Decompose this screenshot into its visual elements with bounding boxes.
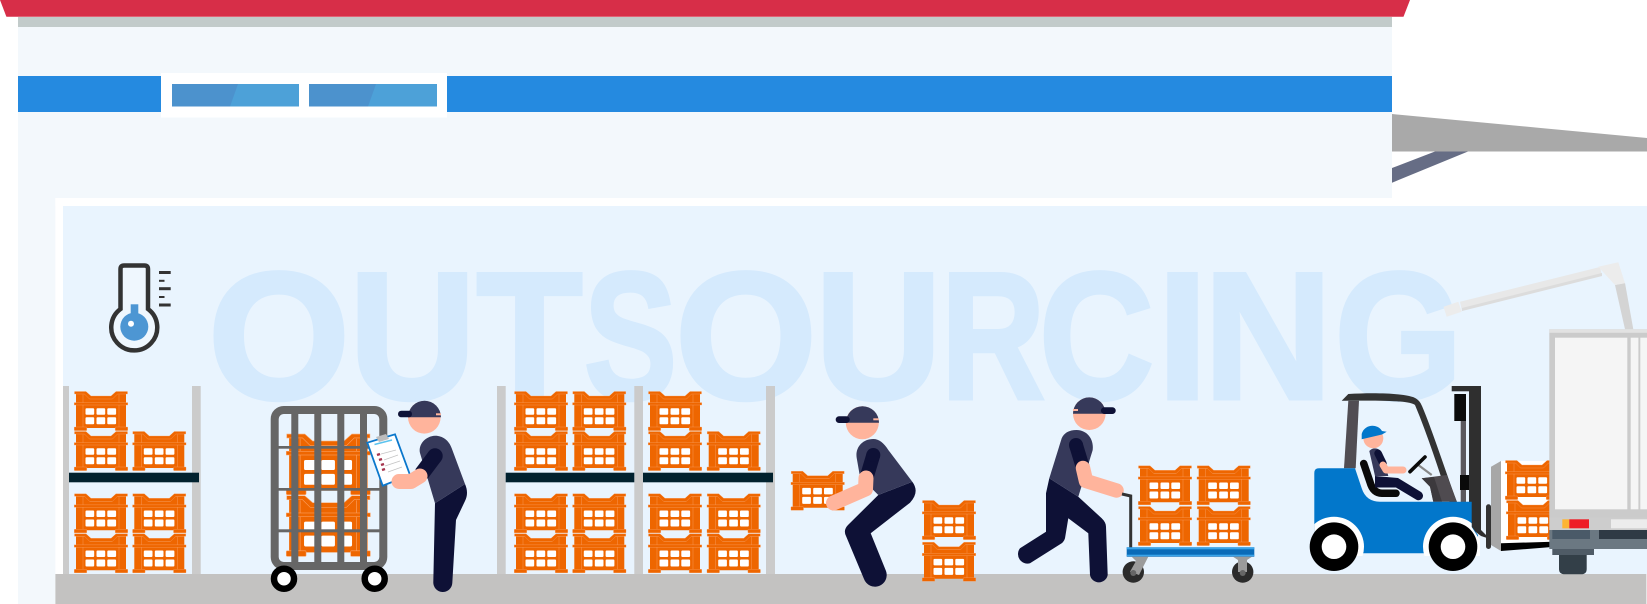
roof gutter [18,17,1392,27]
background word: OUTSOURCING: S [584,236,677,438]
background word: OUTSOURCING: G [1334,236,1462,438]
cab pillars and roof [1342,393,1457,502]
front wheel [1429,522,1477,571]
legs [845,482,916,587]
dashboard [1422,475,1457,502]
head and cap [836,406,879,439]
blue signage band [18,76,1392,112]
floor [55,574,1646,604]
lights panel [1549,518,1647,530]
background word: OUTSOURCING: C [1039,236,1154,438]
background word: OUTSOURCING: I [1157,236,1208,438]
background word: OUTSOURCING: R [941,236,1045,438]
delivery truck rear [1549,329,1647,574]
wheel arches [1314,516,1480,556]
seat [1364,464,1396,493]
torso [420,436,465,503]
icon: thermometer [111,266,171,350]
cargo box [1549,329,1647,518]
sleeve [867,455,873,477]
truck tyre [1559,555,1587,574]
crate stack on floor [922,500,976,581]
sign windows [161,73,447,118]
roof edge [0,0,1410,17]
worker with clipboard [367,401,467,592]
platform cart with crates [1122,466,1254,583]
open loading bay interior [55,198,1647,574]
background word: OUTSOURCING: U [349,236,476,438]
fork carriage with crates [1491,460,1560,551]
head and cap [1073,397,1116,430]
sleeve [422,456,435,474]
background word: OUTSOURCING: N [1204,236,1332,438]
legs [1018,478,1108,582]
forklift [1304,386,1560,577]
forearm [399,476,420,482]
arm [834,478,866,503]
background word: OUTSOURCING: T [476,236,582,438]
clipboard [367,434,410,486]
roll cage with crates [274,410,385,589]
trousers [433,484,467,592]
head and cap [398,401,441,434]
truck tail lift arm [1444,262,1633,329]
sleeve [1076,445,1083,467]
bumper [1549,530,1647,555]
background word: OUTSOURCING: O [675,236,817,438]
side canopy [1392,114,1647,183]
forklift body [1314,468,1478,553]
steering wheel [1410,457,1432,475]
background word: OUTSOURCING: O [208,236,350,438]
shelf unit: left [63,386,201,574]
mast [1452,386,1491,549]
driver [1362,426,1423,500]
torso [856,439,912,495]
worker pushing cart [1018,397,1116,582]
background word: OUTSOURCING: U [815,236,942,438]
worker lifting crate [834,406,916,587]
crate carried by lifting worker [791,471,844,510]
shelf unit: centre double bay [497,386,775,574]
torso [1049,430,1093,497]
arm [1083,468,1116,490]
rear wheel [1310,522,1358,571]
